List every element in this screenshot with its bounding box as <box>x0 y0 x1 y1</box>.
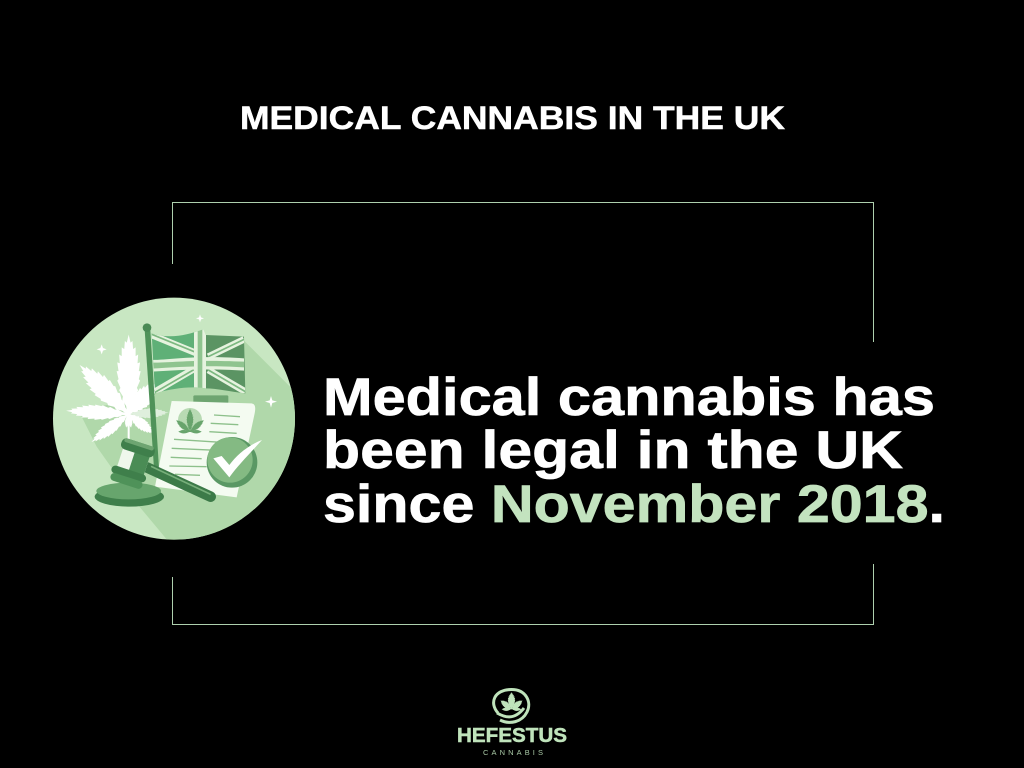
frame <box>172 202 874 624</box>
icon: gavel <box>95 437 211 507</box>
icon: sparkles <box>97 314 277 408</box>
main statement: been legal in the UK <box>323 421 903 480</box>
sub wordmark: CANNABIS <box>483 748 543 757</box>
wordmark: HEFESTUS <box>457 725 567 747</box>
long shadow <box>80 340 307 543</box>
icon: cannabis leaf <box>66 335 169 447</box>
main statement <box>323 368 945 534</box>
main statement: Medical cannabis has <box>323 368 935 427</box>
title: MEDICAL CANNABIS IN THE UK <box>240 100 785 136</box>
gavel block <box>95 487 164 507</box>
logo: Hefestus Cannabis <box>457 690 567 757</box>
icon: UK flag <box>152 327 245 393</box>
icon: flag pole <box>143 323 159 468</box>
icon: UK law illustration <box>53 298 307 543</box>
icon: logo mark <box>494 690 529 722</box>
gavel handle <box>147 467 211 497</box>
gavel head <box>108 437 156 490</box>
icon: check badge <box>207 437 262 488</box>
main statement: since November 2018 . <box>323 475 945 534</box>
icon: document <box>155 395 255 497</box>
